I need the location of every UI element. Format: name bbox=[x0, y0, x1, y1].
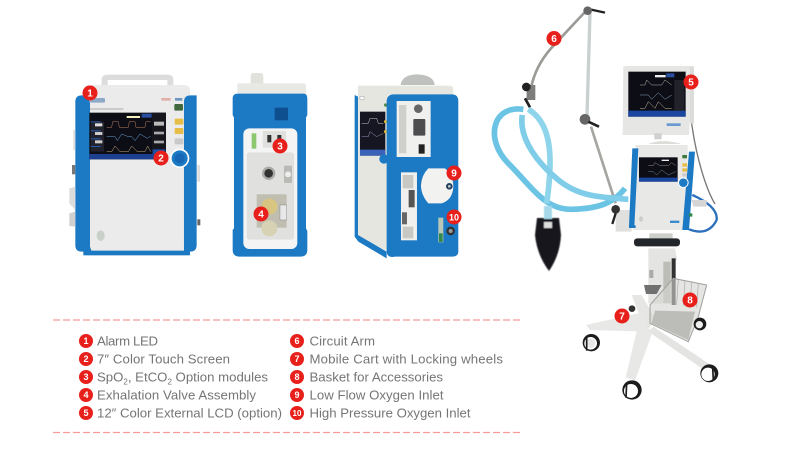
legend item 3: 3 bbox=[83, 372, 89, 382]
legend item 10: High Pressure Oxygen Inlet bbox=[310, 406, 471, 420]
legend item 5: 5 bbox=[83, 408, 89, 418]
badge 4 bbox=[254, 206, 268, 222]
badge 7: 7 bbox=[619, 312, 625, 322]
legend item 8: 8 bbox=[294, 372, 300, 382]
reservoir bag bbox=[535, 206, 561, 271]
device: side view bbox=[233, 73, 307, 257]
legend item 8: Basket for Accessories bbox=[310, 370, 443, 384]
badge 10: 10 bbox=[449, 212, 459, 222]
legend item 3: 2 bbox=[123, 378, 128, 386]
legend item 3: SpO bbox=[97, 370, 123, 384]
legend item 3 bbox=[79, 370, 268, 386]
badge 6 bbox=[546, 31, 562, 46]
device: rear view bbox=[355, 74, 458, 258]
legend item 2: 7″ Color Touch Screen bbox=[97, 352, 230, 366]
badge 5 bbox=[684, 74, 698, 90]
legend item 10: 10 bbox=[293, 409, 302, 418]
badge 3: 3 bbox=[277, 142, 283, 152]
legend item 7: 7 bbox=[294, 354, 300, 364]
legend item 1: 1 bbox=[83, 336, 89, 346]
device: external LCD monitor bbox=[623, 66, 715, 204]
legend item 6: Circuit Arm bbox=[310, 334, 375, 348]
badge 4: 4 bbox=[258, 210, 264, 220]
circuit arm and post bbox=[522, 6, 616, 203]
legend bbox=[79, 334, 503, 420]
badge 6: 6 bbox=[551, 34, 557, 45]
badge 10 bbox=[446, 210, 462, 224]
device: ventilator on cart bbox=[611, 145, 717, 232]
breathing circuit tubes bbox=[494, 109, 628, 209]
mobile cart bbox=[583, 233, 718, 400]
badge 8 bbox=[682, 292, 698, 308]
badge 2 bbox=[154, 150, 168, 166]
legend item 3: Option modules bbox=[172, 370, 268, 384]
legend item 1: Alarm LED bbox=[97, 334, 158, 348]
badge 1 bbox=[82, 86, 98, 100]
legend item 9: 9 bbox=[294, 390, 300, 400]
badge 7 bbox=[614, 308, 630, 324]
badge 8: 8 bbox=[687, 296, 693, 306]
legend item 3: , EtCO bbox=[128, 370, 167, 384]
badge 5: 5 bbox=[688, 78, 694, 88]
legend item 3: 2 bbox=[167, 378, 172, 386]
device: front view bbox=[69, 75, 200, 256]
badge 3 bbox=[272, 138, 288, 154]
legend item 4: 4 bbox=[83, 390, 89, 400]
legend item 7: Mobile Cart with Locking wheels bbox=[310, 352, 503, 366]
badge 1: 1 bbox=[87, 88, 93, 100]
legend item 9: Low Flow Oxygen Inlet bbox=[310, 388, 444, 402]
legend item 2: 2 bbox=[83, 354, 89, 364]
badge 9 bbox=[446, 166, 462, 180]
legend item 4: Exhalation Valve Assembly bbox=[97, 388, 256, 402]
badge 9: 9 bbox=[451, 168, 457, 180]
legend item 6: 6 bbox=[294, 336, 300, 346]
legend item 5: 12″ Color External LCD (option) bbox=[97, 406, 282, 420]
badge 2: 2 bbox=[158, 154, 164, 164]
